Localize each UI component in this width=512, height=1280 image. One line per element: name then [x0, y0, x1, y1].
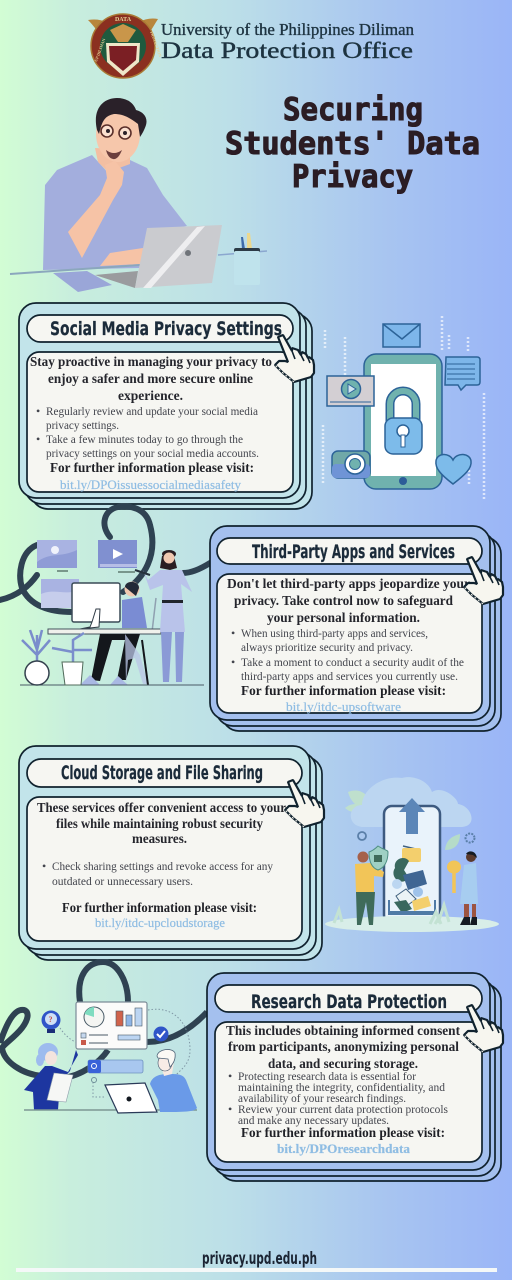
- text card: Protecting research data is essential for: [238, 1069, 416, 1083]
- text card: [215, 1022, 482, 1162]
- header: office name: [161, 20, 414, 64]
- text card: bit.ly/DPOissuessocialmediasafety: [60, 477, 241, 492]
- panel: third-party apps and services: [210, 526, 503, 731]
- text card: •: [231, 655, 235, 669]
- text card: For further information please visit:: [50, 461, 254, 476]
- text card: Review your current data protection protocols: [238, 1102, 448, 1116]
- title: Students' Data: [225, 126, 480, 162]
- panel: social media privacy settings: [19, 303, 314, 509]
- text card: When using third-party apps and services,: [241, 626, 428, 640]
- text card: Take a few minutes today to go through the: [46, 432, 243, 446]
- text card: always prioritize security and privacy.: [241, 640, 413, 654]
- icon: camera: [332, 451, 370, 478]
- title: Securing: [283, 92, 423, 128]
- illustration: research team with dashboard: ?: [48, 1015, 52, 1024]
- text card: •: [228, 1069, 232, 1083]
- illustration: cloud upload from phone with two people: [325, 777, 499, 932]
- text card: [27, 352, 293, 492]
- heading pill: [215, 985, 482, 1013]
- text card: availability of your research findings.: [238, 1091, 406, 1105]
- panel: research data protection: [207, 973, 503, 1181]
- icon: video player: [327, 376, 374, 406]
- text card: These services offer convenient access to your: [37, 801, 286, 816]
- text card: •: [42, 859, 46, 873]
- text card: For further information please visit:: [62, 901, 257, 916]
- text card: data, and securing storage.: [268, 1057, 418, 1072]
- text card: Take a moment to conduct a security audit of the: [241, 655, 464, 669]
- footer: website address: privacy.upd.edu.ph: [202, 1249, 317, 1269]
- text card: bit.ly/itdc-upcloudstorage: [95, 915, 225, 930]
- text card: Stay proactive in managing your privacy to: [30, 355, 272, 370]
- text card: outdated or unnecessary users.: [52, 874, 193, 888]
- text card: experience.: [118, 389, 183, 404]
- illustration: phone with padlock and media icons: [323, 316, 484, 501]
- heading pill: [217, 538, 482, 564]
- icon: pointing hand: [464, 557, 503, 604]
- text card: from participants, anonymizing personal: [228, 1040, 459, 1055]
- title: [225, 92, 480, 195]
- illustration: research team with dashboard: [0, 962, 207, 1113]
- icon: chat bubble: [445, 357, 480, 390]
- heading pill: [27, 759, 302, 787]
- text card: •: [36, 404, 40, 418]
- logo: Data Protection Office seal: PROTECTION: [149, 31, 163, 58]
- text card: privacy settings on your social media accounts.: [46, 446, 259, 460]
- illustration: man thinking at laptop: [10, 98, 267, 292]
- text card: privacy settings.: [46, 418, 119, 432]
- text card: For further information please visit:: [241, 684, 446, 699]
- icon: pointing hand: [464, 1005, 503, 1052]
- text card: This includes obtaining informed consent: [226, 1024, 460, 1039]
- logo: Data Protection Office seal: [88, 14, 163, 78]
- text card: Regularly review and update your social media: [46, 404, 259, 418]
- logo: Data Protection Office seal: UP DILIMAN: [93, 38, 106, 62]
- text card: your personal information.: [267, 611, 420, 626]
- header: office name: Data Protection Office: [161, 38, 413, 64]
- logo: Data Protection Office seal: DATA: [115, 17, 132, 23]
- text card: enjoy a safer and more secure online: [48, 372, 253, 387]
- text card: maintaining the integrity, confidentiality, and: [238, 1080, 445, 1094]
- panel: cloud storage and file sharing: [19, 746, 324, 960]
- icon: envelope: [383, 324, 420, 347]
- text card: Don't let third-party apps jeopardize your: [227, 577, 470, 592]
- title: Privacy: [292, 159, 413, 195]
- heading pill: Cloud Storage and File Sharing: [61, 762, 263, 784]
- heading pill: Social Media Privacy Settings: [50, 318, 282, 340]
- text card: privacy. Take control now to safeguard: [234, 594, 453, 609]
- text card: bit.ly/DPOresearchdata: [277, 1141, 410, 1156]
- text card: For further information please visit:: [241, 1126, 445, 1141]
- icon: pointing hand: [285, 780, 324, 827]
- heading pill: [27, 315, 293, 342]
- text card: files while maintaining robust security: [56, 817, 263, 832]
- text card: [27, 797, 302, 941]
- icon: heart: [436, 454, 471, 484]
- text card: •: [228, 1102, 232, 1116]
- text card: third-party apps and services you currently use.: [241, 669, 458, 683]
- text card: bit.ly/itdc-upsoftware: [286, 699, 401, 714]
- text card: •: [231, 626, 235, 640]
- text card: Check sharing settings and revoke access for any: [52, 859, 273, 873]
- icon: pointing hand: [275, 335, 314, 382]
- text card: and make any necessary updates.: [238, 1113, 389, 1127]
- illustration: people at computer desk with media windows: [0, 506, 210, 685]
- text card: measures.: [132, 832, 187, 847]
- text card: [217, 574, 482, 714]
- text card: •: [36, 432, 40, 446]
- header: office name: University of the Philippines Diliman: [161, 20, 414, 39]
